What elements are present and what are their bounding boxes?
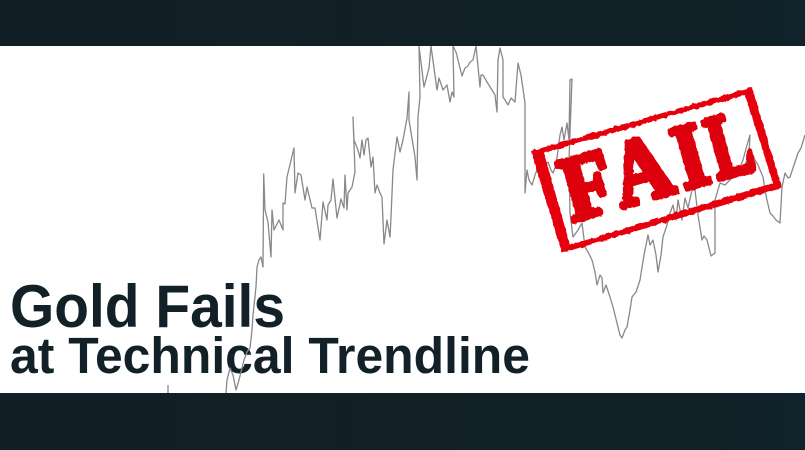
stamp frame	[531, 87, 782, 253]
stamp text: A	[599, 112, 683, 226]
heading: at Technical Trendline: at Technical Trendline	[10, 327, 530, 384]
bottom band	[0, 393, 805, 450]
line chart: gold price	[168, 46, 805, 393]
stamp text	[549, 89, 764, 241]
heading: Gold Fails: Gold Fails	[10, 273, 285, 340]
title	[10, 273, 530, 384]
stamp text: F	[549, 129, 625, 241]
stamp text: L	[695, 89, 764, 199]
top band	[0, 0, 805, 46]
fail stamp	[531, 87, 782, 253]
stamp text: I	[662, 102, 719, 209]
